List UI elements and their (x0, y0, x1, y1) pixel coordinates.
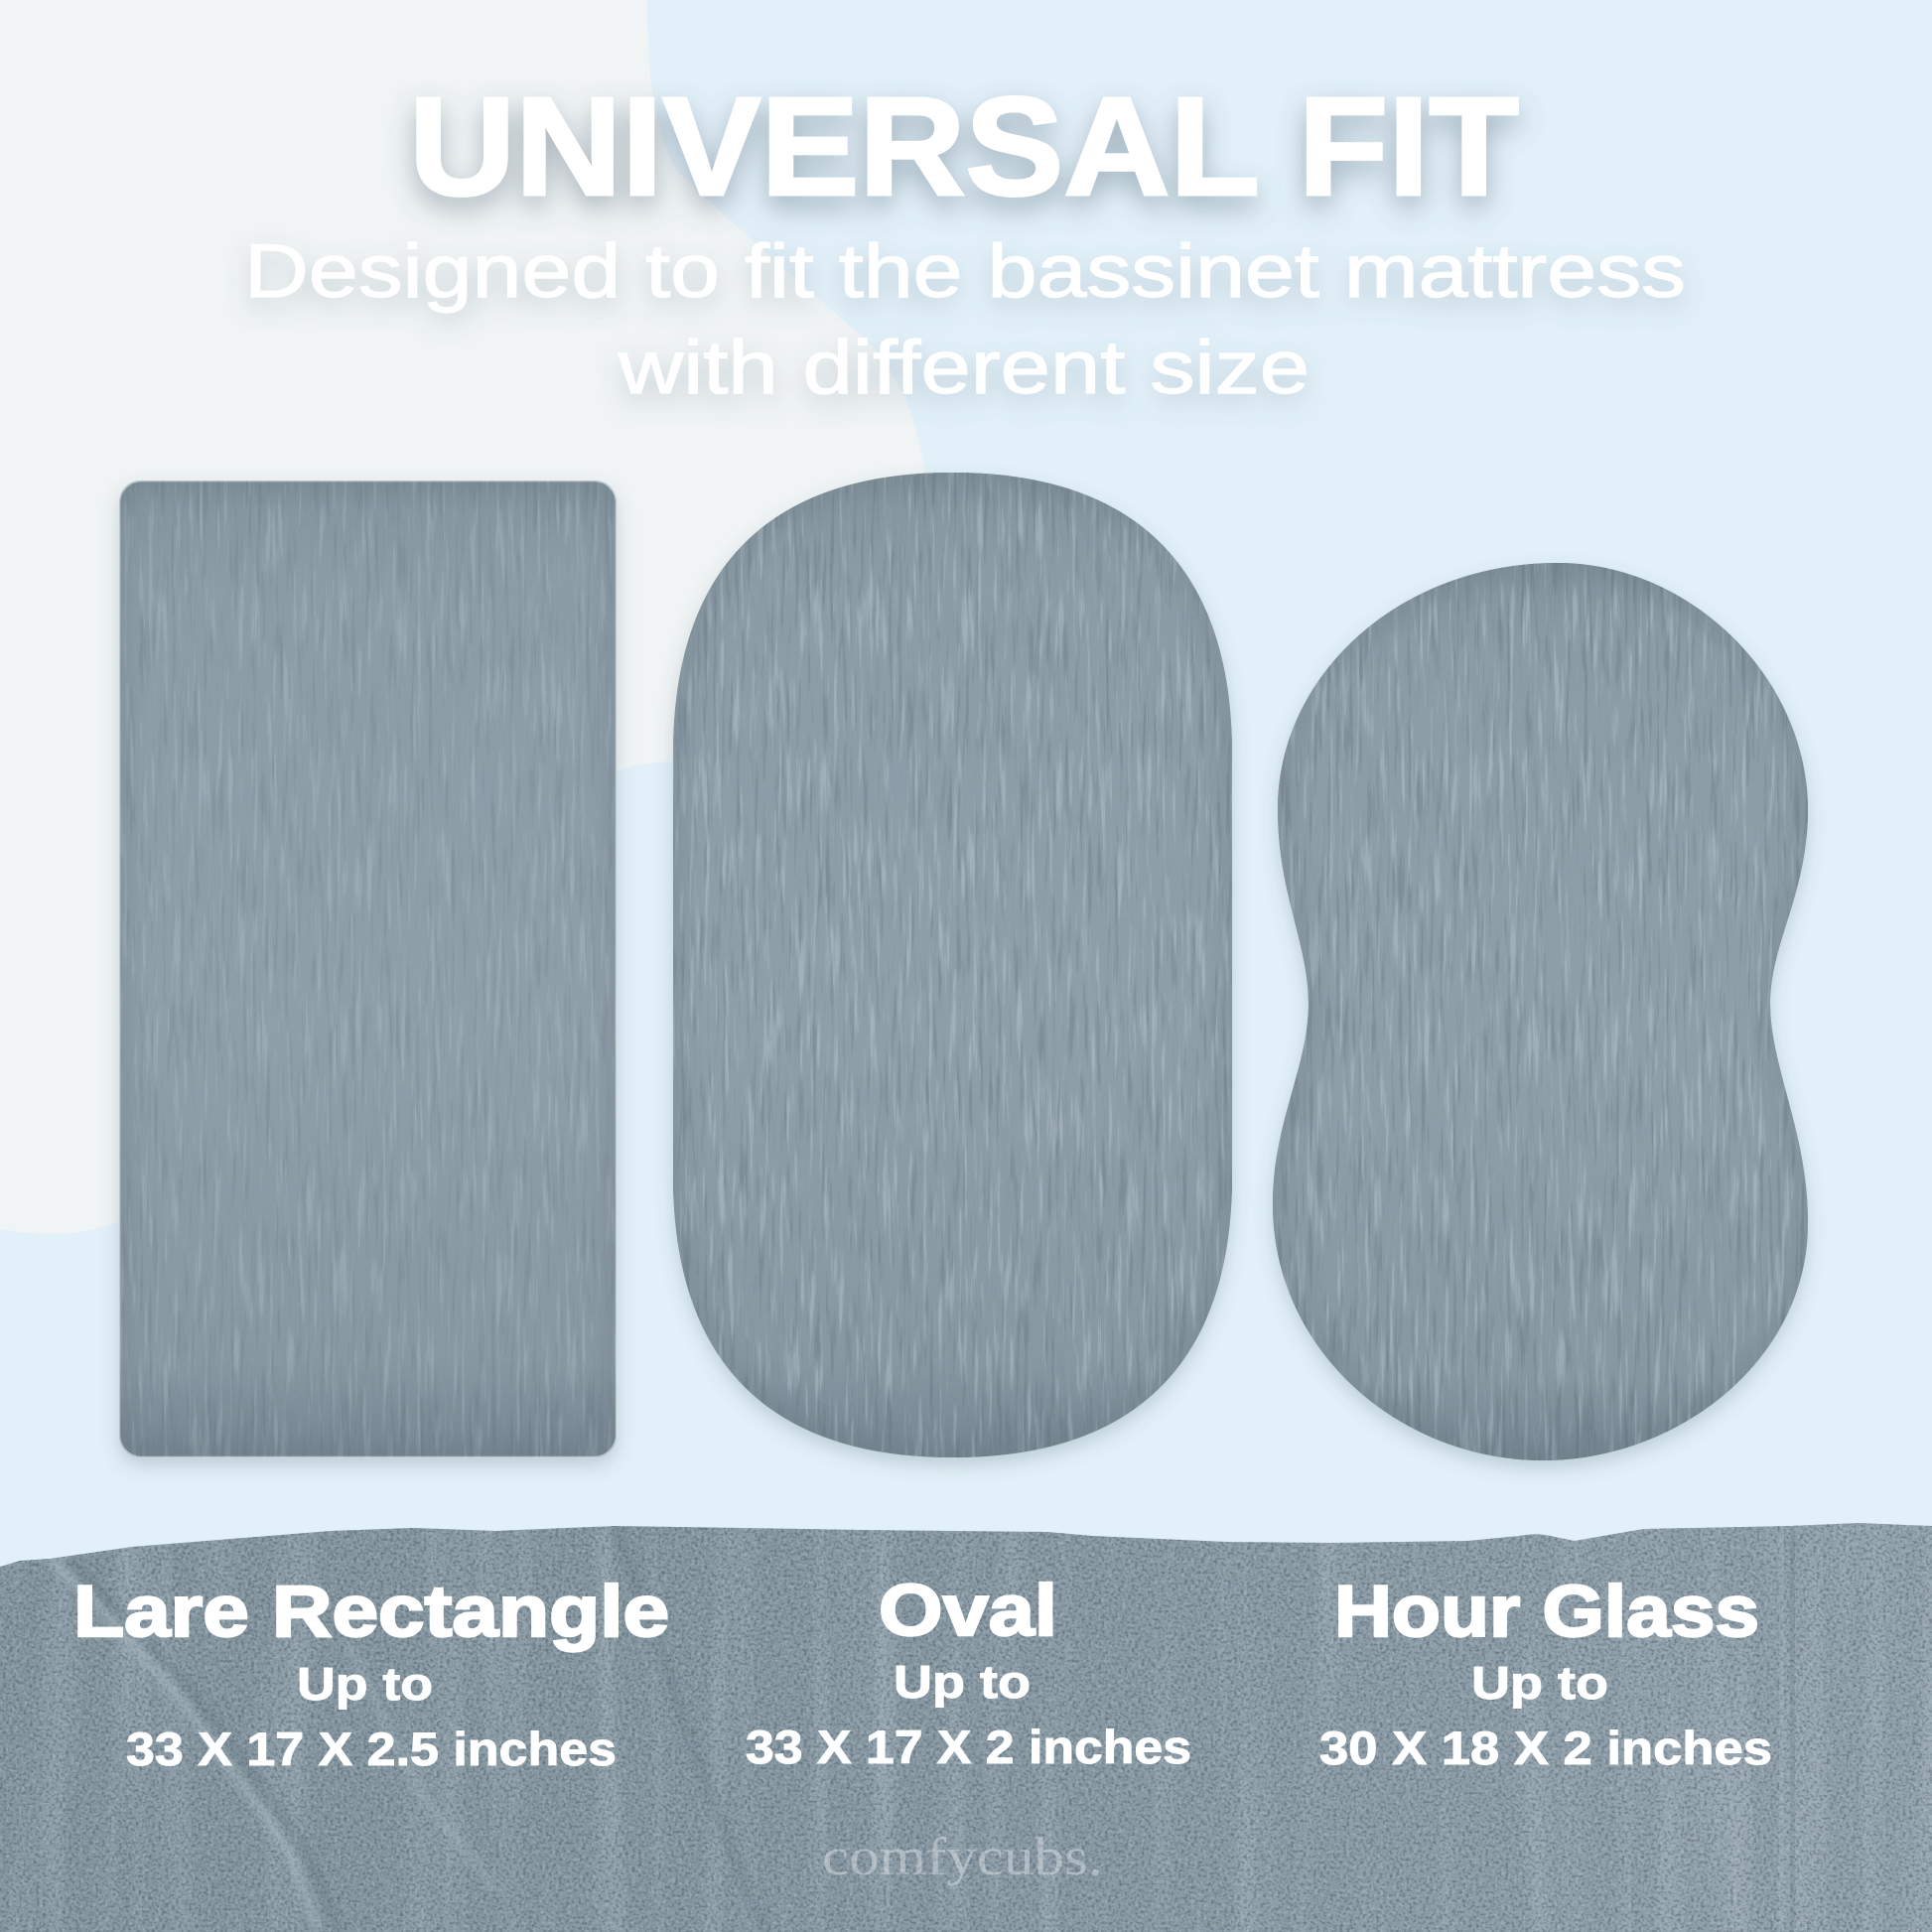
fabric band (0, 1519, 1932, 1932)
label: large rectangle: Lare Rectangle (73, 1572, 669, 1652)
brand logo: comfycubs. (822, 1827, 1103, 1886)
label: large rectangle: Up to (297, 1658, 433, 1710)
title: UNIVERSAL FIT (409, 68, 1519, 224)
sheet: oval (673, 473, 1232, 1457)
label: oval (746, 1571, 1191, 1773)
sheet: large rectangle (119, 481, 617, 1457)
label: oval: Oval (879, 1571, 1057, 1651)
label: oval: Up to (894, 1656, 1031, 1708)
label: large rectangle: 33 X 17 X 2.5 inches (126, 1723, 617, 1775)
subtitle (244, 229, 1686, 410)
label: hour glass: 30 X 18 X 2 inches (1319, 1722, 1772, 1774)
label: hour glass (1319, 1572, 1772, 1774)
subtitle: Designed to fit the bassinet mattress (244, 229, 1686, 314)
label: hour glass: Up to (1471, 1657, 1608, 1709)
sheet: hour glass (1271, 561, 1812, 1462)
label: hour glass: Hour Glass (1334, 1572, 1759, 1652)
background blob (0, 0, 924, 1234)
label: oval: 33 X 17 X 2 inches (746, 1721, 1191, 1773)
label: large rectangle (73, 1572, 669, 1775)
subtitle: with different size (618, 326, 1310, 410)
